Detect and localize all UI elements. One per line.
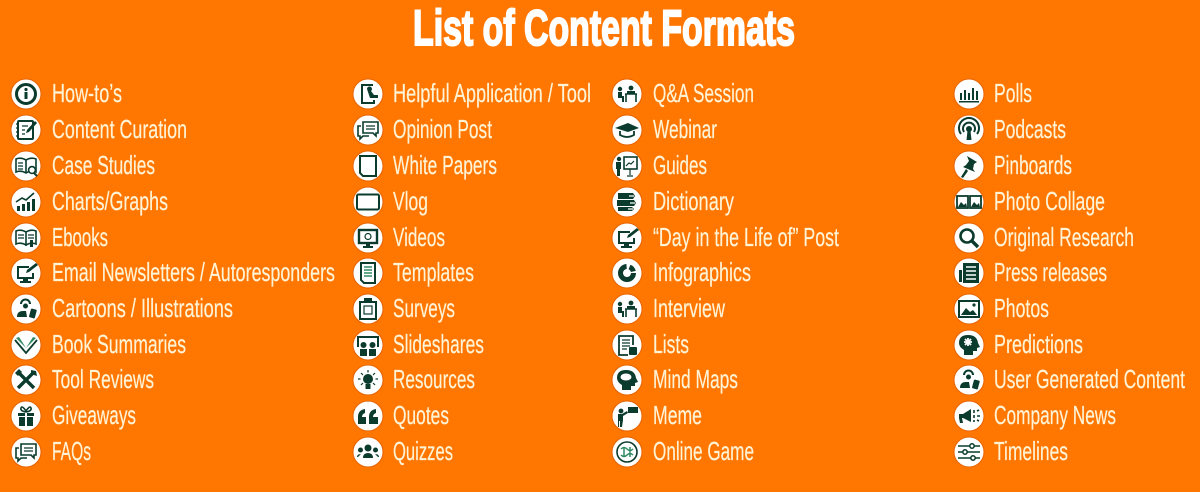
icon: open book from above	[11, 330, 41, 360]
item: Charts/Graphs	[11, 186, 168, 217]
icon: donut chart	[612, 258, 642, 288]
item: Original Research	[954, 222, 1134, 253]
panel: column 1	[11, 78, 335, 467]
item: Content Curation: Content Curation	[52, 114, 187, 144]
item: Webinar: Webinar	[653, 114, 717, 144]
item: Resources: Resources	[393, 364, 475, 394]
item: Surveys: Surveys	[393, 293, 455, 323]
item: Photo Collage	[954, 186, 1105, 217]
item: Company News	[954, 400, 1116, 431]
item: Vlog: Vlog	[393, 186, 428, 216]
item: Ebooks	[11, 222, 108, 253]
item: Ebooks: Ebooks	[52, 222, 108, 252]
item: Slideshares	[353, 329, 484, 360]
item: Resources	[353, 364, 475, 395]
icon: magnifying glass	[954, 223, 984, 253]
icon: two people at desk	[612, 79, 642, 109]
item: Opinion Post: Opinion Post	[393, 114, 493, 144]
item: FAQs	[11, 436, 91, 467]
item: Photo Collage: Photo Collage	[994, 186, 1105, 216]
icon: sliders	[954, 437, 984, 467]
icon: monitor with play	[353, 223, 383, 253]
item: Tool Reviews	[11, 364, 154, 395]
item: Book Summaries: Book Summaries	[52, 329, 186, 359]
item: Email Newsletters / Autoresponders	[11, 257, 335, 288]
item: Timelines: Timelines	[994, 436, 1068, 466]
item: Podcasts	[954, 114, 1066, 145]
item: Case Studies	[11, 150, 155, 181]
item: FAQs: FAQs	[52, 436, 91, 466]
icon: speech bubbles	[353, 115, 383, 145]
item: Webinar	[612, 114, 717, 145]
item: Lists: Lists	[653, 329, 689, 359]
panel: column 3	[612, 78, 840, 467]
icon: two people under slide	[353, 330, 383, 360]
icon: book and magnifier	[11, 151, 41, 181]
icon: widescreen frame	[353, 187, 383, 217]
item: Photos: Photos	[994, 293, 1049, 323]
item: Predictions: Predictions	[994, 329, 1083, 359]
icon: tablet page	[353, 151, 383, 181]
icon: megaphone	[954, 401, 984, 431]
item: Giveaways	[11, 400, 136, 431]
icon: monitor and pen	[11, 258, 41, 288]
item: Polls: Polls	[994, 78, 1032, 108]
item: Templates: Templates	[393, 257, 474, 287]
item: Helpful Application / Tool	[353, 78, 591, 109]
item: Meme	[612, 400, 702, 431]
item: Q&A Session	[612, 78, 754, 109]
icon: person with tablet	[954, 365, 984, 395]
item: Quotes: Quotes	[393, 400, 449, 430]
item: Press releases: Press releases	[994, 257, 1107, 287]
icon: document	[353, 258, 383, 288]
item: Content Curation	[11, 114, 187, 145]
item: Q&A Session: Q&A Session	[653, 78, 754, 108]
title: List of Content Formats	[413, 0, 795, 56]
item: Charts/Graphs: Charts/Graphs	[52, 186, 168, 216]
item: Infographics	[612, 257, 751, 288]
panel: column 4	[954, 78, 1186, 467]
item: Dictionary: Dictionary	[653, 186, 734, 216]
item: Case Studies: Case Studies	[52, 150, 155, 180]
item: Mind Maps: Mind Maps	[653, 364, 738, 394]
icon: notebook and pen	[11, 115, 41, 145]
item: Helpful Application / Tool: Helpful Application / Tool	[393, 78, 591, 108]
icon: gift box	[11, 401, 41, 431]
item: Tool Reviews: Tool Reviews	[52, 364, 154, 394]
icon: presenter at board	[612, 151, 642, 181]
item: Infographics: Infographics	[653, 257, 751, 287]
item: Interview: Interview	[653, 293, 725, 323]
item: Surveys	[353, 293, 455, 324]
item: Online Game: Online Game	[653, 436, 754, 466]
icon: picture frame	[954, 294, 984, 324]
icon: two people at desk	[612, 294, 642, 324]
item: "Day in the Life of" Post: “Day in the Life of” Post	[653, 222, 840, 252]
item: Lists	[612, 329, 689, 360]
item: Guides: Guides	[653, 150, 707, 180]
item: Book Summaries	[11, 329, 186, 360]
icon: head with brain	[612, 365, 642, 395]
icon: person with tablet	[11, 294, 41, 324]
item: Guides	[612, 150, 707, 181]
item: Interview	[612, 293, 725, 324]
icon: group of people	[353, 437, 383, 467]
item: Timelines	[954, 436, 1068, 467]
item: Predictions	[954, 329, 1083, 360]
icon: quotation marks	[353, 401, 383, 431]
item: Slideshares: Slideshares	[393, 329, 484, 359]
item: White Papers: White Papers	[393, 150, 497, 180]
icon: broadcast signal	[954, 115, 984, 145]
item: Mind Maps	[612, 364, 738, 395]
item: Meme: Meme	[653, 400, 702, 430]
item: Giveaways: Giveaways	[52, 400, 136, 430]
item: Quotes	[353, 400, 449, 431]
item: Templates	[353, 257, 474, 288]
item: Original Research: Original Research	[994, 222, 1134, 252]
icon: speech bubbles	[11, 437, 41, 467]
item: How-to's: How-to’s	[52, 78, 122, 108]
item: Polls	[954, 78, 1032, 109]
icon: phone with hand	[353, 79, 383, 109]
icon: person pointing at screen	[612, 401, 642, 431]
item: Quizzes: Quizzes	[393, 436, 453, 466]
icon: stack of books	[612, 187, 642, 217]
icon: info	[11, 79, 41, 109]
icon: crossed tools	[11, 365, 41, 395]
item: How-to's	[11, 78, 122, 109]
icon: clipboard	[353, 294, 383, 324]
item: Pinboards: Pinboards	[994, 150, 1072, 180]
item: Vlog	[353, 186, 428, 217]
item: Online Game	[612, 436, 754, 467]
icon: newspaper	[954, 258, 984, 288]
icon: graduation cap	[612, 115, 642, 145]
item: White Papers	[353, 150, 497, 181]
icon: bar chart	[954, 79, 984, 109]
icon: push pin	[954, 151, 984, 181]
icon: head with gear	[954, 330, 984, 360]
item: Dictionary	[612, 186, 734, 217]
panel: column 2	[353, 78, 591, 467]
icon: monitor and pen	[612, 223, 642, 253]
item: Email Newsletters / Autoresponders: Email Newsletters / Autoresponders	[52, 257, 335, 287]
item: Opinion Post	[353, 114, 493, 145]
icon: circular game maze	[612, 437, 642, 467]
icon: rising chart	[11, 187, 41, 217]
icon: checklist	[612, 330, 642, 360]
item: Cartoons / Illustrations: Cartoons / Illustrations	[52, 293, 233, 323]
item: Company News: Company News	[994, 400, 1116, 430]
item: Pinboards	[954, 150, 1072, 181]
icon: light bulb	[353, 365, 383, 395]
icon: open book	[11, 223, 41, 253]
item: Podcasts: Podcasts	[994, 114, 1066, 144]
item: Cartoons / Illustrations	[11, 293, 233, 324]
item: "Day in the Life of" Post	[612, 222, 840, 253]
item: Photos	[954, 293, 1049, 324]
icon: two photos	[954, 187, 984, 217]
item: Press releases	[954, 257, 1107, 288]
item: Videos: Videos	[393, 222, 445, 252]
item: Videos	[353, 222, 445, 253]
item: Quizzes	[353, 436, 453, 467]
